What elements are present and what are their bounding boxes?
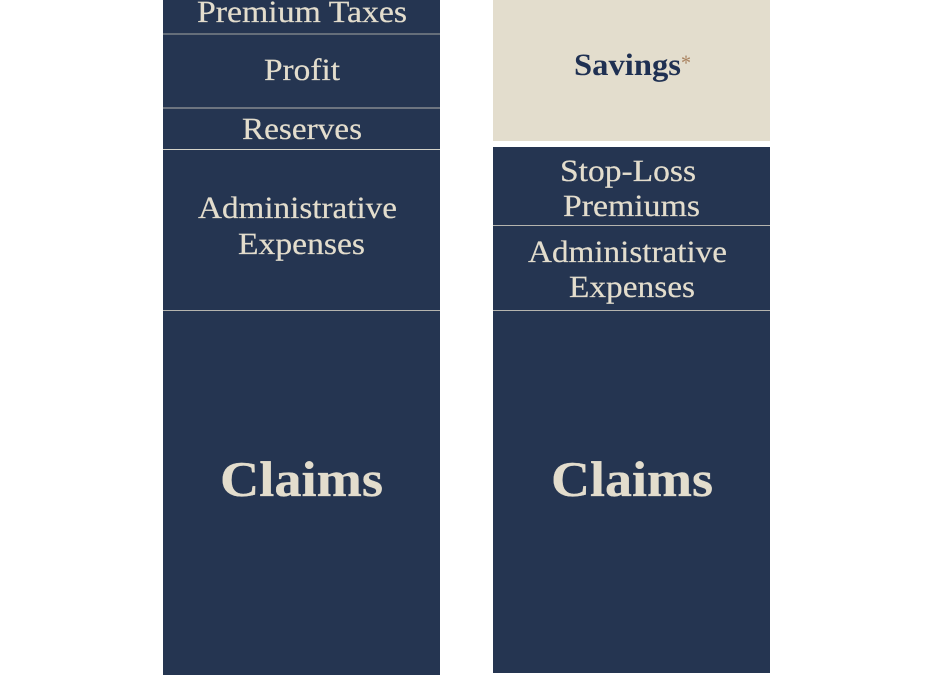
label: administrative expenses: Expenses xyxy=(238,226,365,261)
label: claims: Claims xyxy=(220,451,383,507)
column: self-funded cost stack xyxy=(493,147,770,673)
label: reserves: Reserves xyxy=(242,111,362,146)
label: savings with asterisk: * xyxy=(681,50,691,75)
label: administrative expenses xyxy=(198,190,397,261)
panel: savings xyxy=(493,0,770,141)
label: administrative expenses: Administrative xyxy=(528,234,727,269)
label: stop-loss premiums: Stop-Loss xyxy=(560,153,696,188)
column: fully insured cost stack xyxy=(163,0,440,675)
label: administrative expenses: Expenses xyxy=(569,269,695,304)
label: claims: Claims xyxy=(551,451,713,507)
label: profit: Profit xyxy=(264,52,340,87)
label: stop-loss premiums xyxy=(560,153,700,223)
label: administrative expenses xyxy=(528,234,727,304)
label: administrative expenses: Administrative xyxy=(198,190,397,225)
label: savings with asterisk: Savings xyxy=(574,47,681,82)
label: stop-loss premiums: Premiums xyxy=(563,188,700,223)
